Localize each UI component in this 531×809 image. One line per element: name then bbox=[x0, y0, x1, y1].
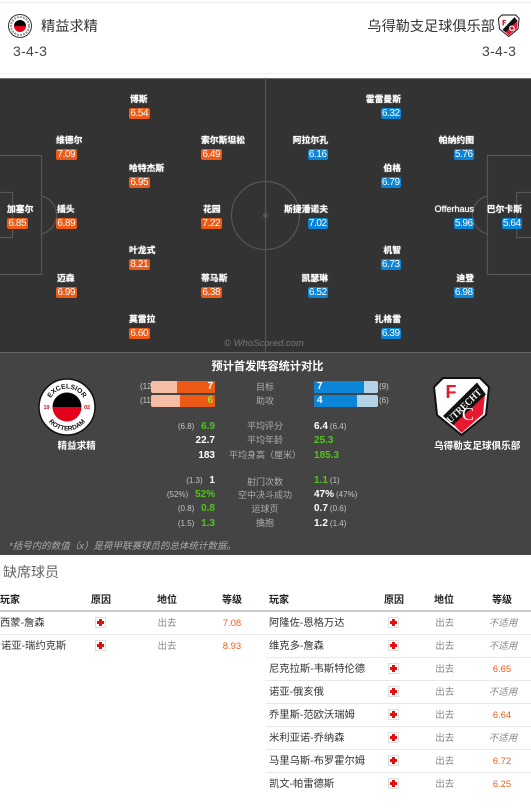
away goals bar: 7 bbox=[317, 381, 323, 392]
row: 米利亚诺·乔纳森: 米利亚诺-乔纳森 bbox=[269, 733, 345, 744]
away assists bar bbox=[314, 395, 378, 407]
player: 花园: 花园 bbox=[203, 204, 221, 214]
row: 诺亚·瑞约克斯: 诺亚-瑞约克斯 bbox=[1, 641, 66, 652]
player: 叶龙式 bbox=[129, 245, 156, 270]
stat: average age bbox=[196, 434, 334, 446]
stat: average age: 22.7 bbox=[196, 434, 215, 446]
row: 诺亚·俄亥俄 bbox=[266, 682, 531, 703]
player: Offerhaus: 5.96 bbox=[455, 218, 473, 229]
stat: aerial duels bbox=[167, 488, 357, 500]
row: 尼克拉斯·韦斯特伦德 bbox=[266, 659, 531, 680]
player: 莫雷拉 bbox=[128, 314, 156, 339]
home assists previous: (11) bbox=[140, 396, 154, 405]
player: 哈特杰斯 bbox=[129, 163, 164, 188]
stat: average height: 平均身高（厘米） bbox=[229, 450, 301, 460]
row: 尼克拉斯·韦斯特伦德: 尼克拉斯-韦斯特伦德 bbox=[269, 664, 365, 675]
player: 迈森: 6.99 bbox=[57, 287, 75, 298]
row: 米利亚诺·乔纳森: 不适用 bbox=[489, 732, 517, 744]
icon: Excelsior crest: ROTTERDAM bbox=[49, 419, 85, 430]
row: 凯文·帕雷德斯 bbox=[266, 774, 531, 795]
row: 凯文·帕雷德斯: 6.25 bbox=[493, 778, 511, 790]
row: 西蒙·詹森: 西蒙-詹森 bbox=[0, 618, 45, 629]
stat: average height: 185.3 bbox=[314, 450, 339, 460]
column headers bbox=[266, 590, 531, 612]
home formation: 3-4-3 bbox=[13, 43, 47, 59]
heading: missing players: 缺席球员 bbox=[3, 564, 59, 580]
player: 凯瑟琳: 6.52 bbox=[309, 287, 327, 298]
stat: shots bbox=[186, 474, 340, 486]
row: 马里乌斯·布罗霍尔姆 bbox=[266, 751, 531, 772]
player: 巴尔卡斯 bbox=[487, 204, 522, 229]
row: 西蒙·詹森 bbox=[0, 617, 241, 629]
player: 扎格雷 bbox=[374, 314, 402, 339]
player: 索尔斯坦松 bbox=[200, 135, 246, 160]
player: 迈森: 迈森 bbox=[57, 273, 75, 283]
player: 蒂马斯: 6.38 bbox=[202, 287, 220, 298]
row: 阿隆佐·恩格万达: 出去 bbox=[435, 618, 454, 628]
row: 维克多·詹森: 出去 bbox=[435, 640, 454, 652]
column headers: 玩家 bbox=[269, 594, 289, 606]
away goals bar bbox=[314, 381, 378, 393]
row: 乔里斯·范欧沃瑞姆 bbox=[266, 705, 531, 726]
table: away missing players bbox=[266, 594, 531, 790]
player: 花园: 7.22 bbox=[202, 218, 220, 229]
icon: Excelsior crest bbox=[38, 378, 96, 436]
player: 伯格: 伯格 bbox=[383, 163, 401, 173]
row: 西蒙·詹森: 7.08 bbox=[223, 618, 241, 628]
column headers bbox=[0, 590, 266, 612]
icon: Excelsior crest: 19 bbox=[43, 404, 49, 410]
stat: tackles bbox=[178, 518, 346, 528]
player: 霍雷曼斯 bbox=[366, 94, 402, 119]
stats title: 预计首发阵容统计对比 bbox=[212, 361, 323, 373]
player: 叶龙式: 8.21 bbox=[130, 259, 148, 270]
icon: Excelsior crest: 02 bbox=[84, 404, 90, 410]
column headers: 地位 bbox=[434, 594, 454, 606]
panel: pitch bbox=[0, 78, 531, 353]
player: Offerhaus bbox=[434, 204, 474, 229]
row: 诺亚·俄亥俄: 诺亚-俄亥俄 bbox=[269, 687, 324, 698]
panel: stats comparison bbox=[0, 353, 531, 555]
stat: shots: 1.1(1) bbox=[314, 474, 340, 486]
watermark: © WhoScored.com bbox=[224, 338, 304, 349]
away assists bar: 4 bbox=[317, 395, 323, 406]
row: 马里乌斯·布罗霍尔姆: 6.72 bbox=[493, 756, 511, 766]
row: 诺亚·俄亥俄: 出去 bbox=[435, 686, 454, 698]
player: 维德尔 bbox=[56, 135, 82, 160]
stat: tackles: 1.2(1.4) bbox=[314, 518, 346, 528]
icon: Excelsior crest: EXCELSIOR bbox=[47, 384, 86, 398]
player: 花园 bbox=[201, 204, 222, 229]
home goals bar bbox=[151, 381, 215, 393]
player: 斯捷潘诺夫 bbox=[284, 204, 328, 229]
row: 诺亚·瑞约克斯 bbox=[1, 640, 241, 652]
assists label: 助攻 bbox=[256, 396, 274, 406]
player: 斯捷潘诺夫: 斯捷潘诺夫 bbox=[284, 204, 328, 214]
player: 机智: 6.73 bbox=[382, 259, 400, 270]
player: 阿拉尔孔: 阿拉尔孔 bbox=[293, 135, 328, 145]
column headers: 地位 bbox=[157, 594, 177, 606]
player: 伯格 bbox=[381, 163, 402, 188]
player: 迪登: 迪登 bbox=[456, 273, 474, 283]
player: 插头: 插头 bbox=[57, 204, 75, 214]
stat: aerial duels: 空中决斗成功 bbox=[238, 490, 292, 500]
player: 巴尔卡斯: 5.64 bbox=[503, 218, 521, 229]
player: 霍雷曼斯: 6.32 bbox=[382, 108, 400, 119]
row: 凯文·帕雷德斯: 凯文-帕雷德斯 bbox=[269, 779, 334, 790]
footnote: *括号内的数值（x）是荷甲联赛球员的总体统计数据。 bbox=[9, 541, 236, 552]
home team name: 精益求精 bbox=[41, 19, 98, 35]
player: 霍雷曼斯: 霍雷曼斯 bbox=[366, 94, 401, 104]
row: 维克多·詹森 bbox=[266, 636, 531, 657]
row: 马里乌斯·布罗霍尔姆: 出去 bbox=[435, 756, 454, 766]
player: 迪登: 6.98 bbox=[455, 287, 473, 298]
row: 尼克拉斯·韦斯特伦德: 出去 bbox=[435, 664, 454, 674]
home goals previous: (12) bbox=[140, 382, 154, 391]
player: 蒂马斯: 蒂马斯 bbox=[201, 273, 227, 283]
player: 机智 bbox=[381, 245, 401, 270]
home assists bar: 6 bbox=[207, 395, 213, 406]
away team label: 乌得勒支足球俱乐部 bbox=[434, 441, 520, 452]
player: 阿拉尔孔: 6.16 bbox=[309, 149, 327, 160]
player: 加塞尔: 6.85 bbox=[8, 218, 26, 229]
row: 维克多·詹森: 不适用 bbox=[489, 640, 517, 652]
column headers: 等级 bbox=[222, 594, 242, 606]
stat: aerial duels: 47%(47%) bbox=[314, 488, 357, 500]
player: 机智: 机智 bbox=[383, 245, 401, 255]
row: 西蒙·詹森: 出去 bbox=[158, 618, 177, 628]
home team label: 精益求精 bbox=[58, 441, 96, 452]
stat: average rating bbox=[178, 420, 346, 432]
stat: average age: 平均年龄 bbox=[247, 435, 283, 445]
away team name: 乌得勒支足球俱乐部 bbox=[367, 19, 495, 35]
row: 诺亚·瑞约克斯: 出去 bbox=[158, 640, 177, 652]
player: 凯瑟琳 bbox=[302, 273, 328, 298]
player: 扎格雷: 扎格雷 bbox=[375, 314, 401, 324]
stat: average rating: 6.4(6.4) bbox=[314, 420, 346, 432]
player: 帕纳约图: 帕纳约图 bbox=[439, 135, 474, 145]
row: 维克多·詹森: 维克多-詹森 bbox=[269, 641, 324, 652]
player: 帕纳约图 bbox=[438, 135, 474, 160]
player: 加塞尔: 加塞尔 bbox=[7, 204, 33, 214]
row: 阿隆佐·恩格万达: 阿隆佐-恩格万达 bbox=[269, 618, 345, 629]
player: 扎格雷: 6.39 bbox=[382, 328, 400, 339]
stat: average height bbox=[198, 450, 339, 460]
stat: average rating: (6.8) 6.9 bbox=[178, 420, 215, 432]
player: 维德尔: 维德尔 bbox=[56, 135, 82, 145]
player: 伯格: 6.79 bbox=[382, 177, 400, 188]
away assists previous: (6) bbox=[379, 396, 389, 405]
icon: Utrecht small crest bbox=[498, 14, 520, 38]
player: 斯捷潘诺夫: 7.02 bbox=[309, 218, 327, 229]
stat: shots: 射门次数 bbox=[247, 476, 283, 486]
home goals bar: 7 bbox=[207, 381, 213, 392]
player: 巴尔卡斯: 巴尔卡斯 bbox=[487, 204, 522, 214]
row: 乔里斯·范欧沃瑞姆: 6.64 bbox=[493, 710, 511, 720]
icon: Utrecht crest: UTRECHT bbox=[445, 387, 484, 426]
stat: average age: 25.3 bbox=[314, 434, 333, 446]
column headers: 玩家 bbox=[0, 594, 20, 606]
stat: goals bbox=[140, 381, 389, 393]
player: 阿拉尔孔 bbox=[292, 135, 328, 160]
icon: Utrecht crest bbox=[433, 377, 490, 436]
player: 博斯 bbox=[129, 94, 150, 119]
player: 维德尔: 7.09 bbox=[57, 149, 75, 160]
row: 凯文·帕雷德斯: 出去 bbox=[435, 778, 454, 790]
player: 莫雷拉: 6.60 bbox=[130, 328, 148, 339]
stat: dribbles: 0.7(0.6) bbox=[314, 502, 346, 514]
player: 莫雷拉: 莫雷拉 bbox=[129, 314, 155, 324]
row: 乔里斯·范欧沃瑞姆: 出去 bbox=[435, 710, 454, 720]
player: Offerhaus: Offerhaus bbox=[435, 204, 474, 214]
row: 阿隆佐·恩格万达 bbox=[269, 617, 518, 629]
icon: Utrecht crest: C bbox=[462, 404, 474, 424]
player: 帕纳约图: 5.76 bbox=[455, 149, 473, 160]
player: 索尔斯坦松: 6.49 bbox=[202, 149, 220, 160]
column headers: 原因 bbox=[384, 594, 404, 606]
player: 插头 bbox=[56, 204, 77, 229]
row: 尼克拉斯·韦斯特伦德: 6.65 bbox=[493, 664, 511, 674]
header: team names and formations bbox=[0, 2, 531, 74]
row: 米利亚诺·乔纳森: 出去 bbox=[435, 732, 454, 744]
column headers: 原因 bbox=[91, 594, 111, 606]
row: 马里乌斯·布罗霍尔姆: 马里乌斯-布罗霍尔姆 bbox=[269, 756, 365, 767]
away formation: 3-4-3 bbox=[482, 43, 516, 59]
stat: aerial duels: (52%) 52% bbox=[167, 488, 215, 500]
icon: Utrecht crest: F bbox=[446, 382, 456, 402]
stat: dribbles: (0.8) 0.8 bbox=[178, 502, 215, 514]
stat: tackles: 擒抱 bbox=[256, 518, 274, 528]
player: 加塞尔 bbox=[6, 204, 34, 229]
player: 哈特杰斯: 6.95 bbox=[130, 177, 148, 188]
player: 博斯: 6.54 bbox=[130, 108, 148, 119]
stat: tackles: (1.5) 1.3 bbox=[178, 518, 215, 528]
row: 米利亚诺·乔纳森 bbox=[266, 728, 531, 749]
player: 博斯: 博斯 bbox=[130, 94, 148, 104]
player: 蒂马斯 bbox=[201, 273, 228, 298]
row: 诺亚·瑞约克斯: 8.93 bbox=[223, 640, 241, 652]
player: 叶龙式: 叶龙式 bbox=[129, 245, 155, 255]
stat: shots: (1.3) 1 bbox=[186, 474, 215, 486]
player: 凯瑟琳: 凯瑟琳 bbox=[302, 273, 328, 283]
row: 乔里斯·范欧沃瑞姆: 乔里斯-范欧沃瑞姆 bbox=[269, 710, 355, 721]
stat: dribbles: 运球页 bbox=[251, 504, 278, 514]
stat: assists bbox=[140, 395, 389, 407]
row: 诺亚·俄亥俄: 不适用 bbox=[489, 686, 517, 698]
away goals previous: (9) bbox=[379, 382, 389, 391]
table: home missing players bbox=[0, 594, 266, 652]
goals label: 目标 bbox=[256, 382, 274, 392]
player: 哈特杰斯: 哈特杰斯 bbox=[129, 163, 164, 173]
player: 索尔斯坦松: 索尔斯坦松 bbox=[201, 135, 245, 145]
stat: average height: 183 bbox=[198, 450, 215, 460]
row: 阿隆佐·恩格万达: 不适用 bbox=[489, 618, 517, 628]
stat: dribbles bbox=[178, 502, 346, 514]
stat: average rating: 平均评分 bbox=[247, 421, 283, 431]
player: 迈森 bbox=[56, 273, 77, 298]
player: 迪登 bbox=[454, 273, 474, 298]
player: 插头: 6.89 bbox=[57, 218, 75, 229]
column headers: 等级 bbox=[492, 594, 512, 606]
icon: Excelsior small crest bbox=[8, 14, 32, 38]
home assists bar bbox=[151, 395, 215, 407]
